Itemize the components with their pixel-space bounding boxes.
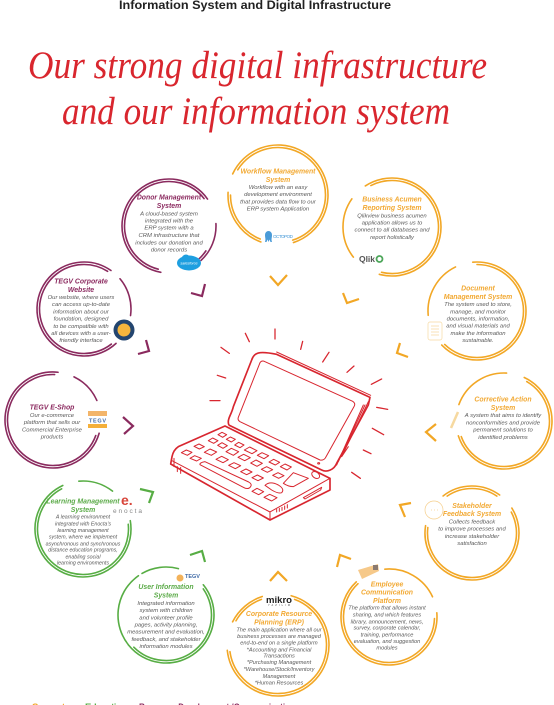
description: Integrated information	[137, 601, 195, 607]
description: evaluation, and suggestion	[354, 639, 420, 645]
description: The platform that allows instant	[348, 606, 426, 612]
panel: corporate resource planning	[209, 572, 347, 705]
description: information about our	[53, 309, 110, 315]
description: and visual materials and	[446, 324, 510, 330]
panel: donor management system	[107, 164, 231, 296]
icon: enocta logo: enocta	[113, 508, 142, 515]
icon: megaphone badge	[358, 564, 379, 579]
description: measurement and evaluation,	[127, 630, 205, 636]
panel: tegv e-shop	[0, 356, 133, 484]
description: information modules	[139, 644, 193, 650]
heading: Communication	[361, 590, 413, 596]
icon: qlik logo	[359, 254, 382, 264]
laptop base	[171, 426, 330, 520]
description: *Warehouse/Stock/Inventory	[244, 667, 316, 673]
description: can access up-to-date	[52, 302, 111, 308]
panel: employee communication platform	[337, 555, 441, 669]
icon: octopod logo	[265, 231, 294, 242]
description: A system that aims to identify	[464, 413, 542, 419]
arrow	[400, 503, 411, 517]
description: all devices with a user-	[51, 331, 111, 337]
arrow	[270, 275, 287, 285]
arrow	[343, 293, 359, 303]
description: includes our donation and	[135, 240, 203, 246]
icon: tegv shop logo: TEGV	[89, 418, 106, 424]
description: business processes are managed	[237, 634, 322, 640]
description: The main application where all our	[236, 627, 323, 633]
ring	[212, 129, 344, 261]
panel: stakeholder feedback system	[400, 467, 538, 599]
description: survey, corporate calendar,	[353, 626, 421, 632]
heading: Learning Management	[46, 498, 120, 506]
icon: qlik logo: Qlik	[359, 254, 375, 264]
panel: document management system	[397, 258, 530, 364]
description: integrated with the	[145, 219, 194, 225]
description: integrated with Enocta's	[55, 521, 111, 527]
heading: TEGV E-Shop	[30, 404, 74, 412]
description: learning management	[57, 528, 109, 534]
description: library, announcement, news,	[351, 619, 423, 625]
description: A cloud-based system	[139, 212, 198, 218]
icon: speech bubble	[425, 501, 443, 519]
legend	[32, 702, 295, 705]
heading: Document	[461, 286, 496, 292]
description: training, performance	[361, 632, 413, 638]
heading: Feedback System	[443, 511, 501, 518]
heading: Platform	[373, 598, 401, 605]
description: end-to-end on a single platform	[240, 641, 318, 647]
description: satisfaction	[457, 541, 487, 547]
description: Our website, where users	[48, 295, 114, 301]
heading: System	[491, 405, 515, 412]
description: ERP system Application	[247, 206, 310, 212]
heading: Workflow Management	[241, 168, 316, 176]
arrow	[397, 343, 408, 357]
panel: tegv corporate website	[18, 243, 150, 375]
panel: workflow management system	[212, 129, 344, 285]
description: system, where we implement	[49, 535, 118, 541]
header: Information System and Digital Infrastructure	[119, 0, 391, 12]
arrow	[190, 551, 205, 562]
description: make the information	[450, 331, 506, 337]
description: distance education programs,	[48, 548, 118, 554]
description: Management	[263, 674, 296, 680]
ring	[0, 356, 117, 484]
icon: tegv shop logo	[88, 411, 107, 428]
description: that provides data flow to our	[240, 199, 317, 205]
ring	[440, 357, 554, 485]
description: to be compatible with	[53, 324, 109, 330]
heading: Donor Management	[137, 194, 202, 202]
description: identified problems	[478, 435, 528, 441]
description: Qlikview business acumen	[357, 213, 427, 219]
heading: System	[154, 592, 178, 599]
heading: Website	[68, 287, 94, 294]
arrow	[138, 340, 149, 354]
ring	[337, 565, 441, 669]
heading: Business Acumen	[362, 196, 422, 204]
heading: System	[157, 203, 181, 210]
laptop illustration	[171, 329, 388, 520]
ring	[98, 547, 234, 683]
description: A learning environment	[55, 515, 111, 521]
description: Collects feedback	[449, 520, 496, 526]
description: *Purchasing Management	[247, 660, 312, 666]
description: *Accounting and Financial	[247, 647, 312, 653]
title	[28, 44, 487, 133]
heading: TEGV Corporate	[54, 278, 108, 286]
description: documents, information,	[447, 317, 509, 323]
icon: round badge logo	[114, 320, 134, 340]
description: CRM infrastructure that	[139, 233, 200, 239]
panel: corrective action system	[426, 357, 554, 485]
heading: Planning (ERP)	[254, 619, 305, 626]
description: feedback, and stakeholder	[131, 637, 202, 643]
panel: learning management system	[27, 473, 153, 585]
description: Our e-commerce	[30, 413, 75, 419]
heading: Management System	[444, 294, 512, 301]
icon: enocta logo: e.	[121, 492, 133, 508]
description: Commercial Enterprise	[22, 427, 83, 433]
description: and volunteer profile	[139, 615, 193, 621]
panel: user information system	[98, 547, 234, 683]
description: Workflow with an easy	[249, 185, 308, 191]
heading: Corrective Action	[474, 396, 532, 404]
heading: System	[266, 177, 290, 184]
arrow	[191, 284, 205, 296]
description: sustainable.	[462, 338, 494, 344]
description: foundation, designed	[54, 317, 109, 323]
icon: mikro logo: mikro	[266, 595, 293, 605]
description: products	[40, 435, 63, 441]
description: asynchronous and synchronous	[46, 541, 121, 547]
description: learning environments	[57, 561, 109, 567]
description: The system used to store,	[444, 302, 512, 308]
arrow	[426, 424, 436, 441]
description: manage, and monitor	[450, 309, 507, 315]
ring	[27, 473, 139, 585]
panel: business acumen reporting system	[323, 158, 461, 303]
icon: enocta logo	[113, 492, 142, 515]
ring	[424, 258, 530, 364]
ring	[107, 164, 231, 288]
ring	[209, 576, 347, 705]
heading: Reporting System	[363, 205, 421, 212]
icon: document	[428, 322, 442, 340]
title: and our information system	[62, 90, 450, 133]
heading: System	[71, 507, 95, 514]
keyboard	[181, 432, 322, 512]
description: increase stakeholder	[445, 534, 500, 540]
arrow	[123, 417, 133, 434]
description: permanent solutions to	[472, 428, 534, 434]
description: report holistically	[370, 235, 415, 241]
ring	[18, 243, 150, 375]
description: friendly interface	[59, 338, 103, 344]
heading: Stakeholder	[452, 503, 492, 510]
icon: tegv digital logo: TEGV	[185, 574, 200, 580]
heading: Corporate Resource	[246, 611, 312, 618]
arrow	[337, 555, 351, 567]
light rays	[210, 329, 388, 478]
ring	[406, 467, 538, 599]
description: Transactions	[263, 653, 295, 659]
description: to improve processes and	[438, 527, 506, 533]
description: pages, activity planning,	[134, 623, 197, 629]
heading: Employee	[371, 582, 403, 588]
description: ERP system with a	[144, 226, 194, 232]
description: application allows us to	[362, 221, 423, 227]
description: modules	[376, 646, 398, 652]
laptop lid	[228, 352, 371, 471]
description: sharing, and which features	[353, 613, 421, 619]
ring	[323, 158, 461, 296]
description: system with children	[139, 608, 193, 614]
description: platform that sells our	[23, 420, 81, 426]
title: Our strong digital infrastructure	[28, 44, 487, 87]
icon: salesforce logo: salesforce	[180, 262, 198, 266]
description: development environment	[244, 192, 312, 198]
description: connect to all databases and	[354, 228, 430, 234]
description: *Human Resources	[255, 680, 303, 686]
icon: pencil	[451, 412, 458, 428]
icon: mikro logo: YAZILIM	[268, 604, 290, 607]
description: enabling social	[65, 554, 101, 560]
icon: octopod logo: OCTOPOD	[273, 234, 294, 239]
description: donor records	[151, 247, 187, 253]
arrow	[270, 572, 287, 581]
description: nonconformities and provide	[466, 421, 541, 427]
arrow	[140, 489, 153, 503]
heading: User Information	[138, 584, 194, 591]
